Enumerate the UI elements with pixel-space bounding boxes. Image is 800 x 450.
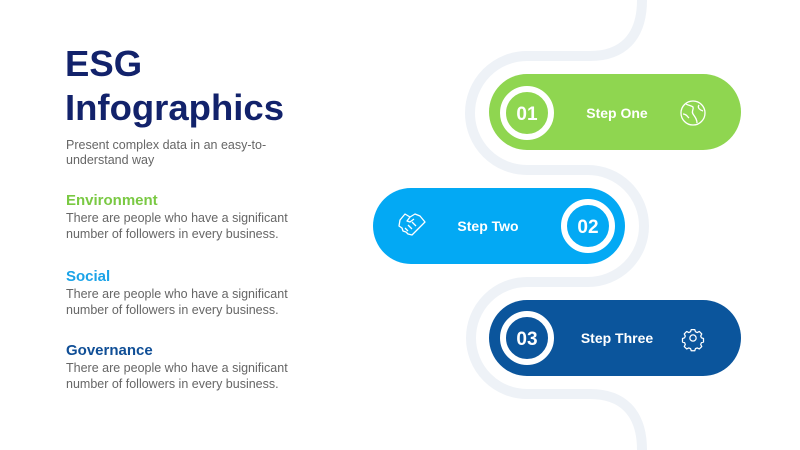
step 1 pill: Step One <box>586 105 648 121</box>
title <box>65 43 284 128</box>
section: social: Social <box>66 268 110 285</box>
icon: handshake <box>399 214 425 235</box>
section: governance: There are people who have a significant <box>66 361 288 375</box>
step 2 pill: 02 <box>577 217 599 238</box>
step 3 pill: 03 <box>516 329 538 350</box>
section: governance: Governance <box>66 342 153 359</box>
wavy path <box>470 0 644 450</box>
icon: globe <box>681 101 705 125</box>
step 1 pill: 01 <box>516 104 538 125</box>
icon: gear <box>682 330 704 351</box>
section: environment <box>66 192 288 240</box>
step 3 pill <box>489 300 741 376</box>
subtitle <box>66 138 266 167</box>
title: ESG <box>65 43 142 84</box>
step 3 pill: Step Three <box>581 330 653 346</box>
step 2 pill <box>373 188 625 264</box>
section: social: There are people who have a significant <box>66 287 288 301</box>
subtitle: understand way <box>66 153 154 167</box>
step 1 pill <box>489 74 741 150</box>
section: social <box>66 268 288 316</box>
title: Infographics <box>65 87 284 128</box>
section: governance <box>66 342 288 390</box>
section: governance: number of followers in every business. <box>66 376 279 390</box>
section: environment: number of followers in every business. <box>66 226 279 240</box>
section: environment: Environment <box>66 192 158 209</box>
subtitle: Present complex data in an easy-to- <box>66 138 266 152</box>
section: environment: There are people who have a significant <box>66 211 288 225</box>
step 2 pill: Step Two <box>457 218 519 234</box>
section: social: number of followers in every business. <box>66 302 279 316</box>
